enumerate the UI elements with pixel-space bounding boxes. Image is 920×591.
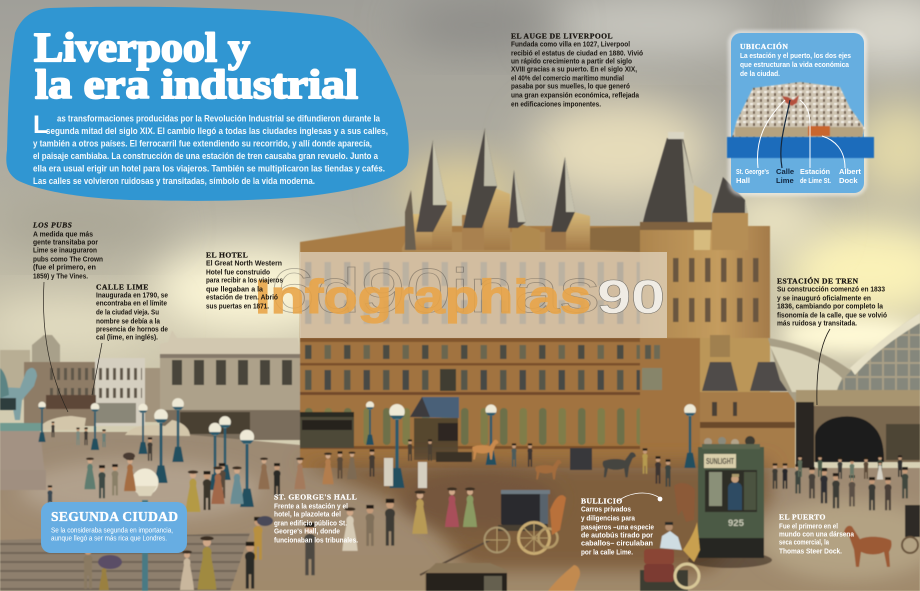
map: labels: Lime [776, 176, 794, 185]
text block: El auge de Liverpool: recibió el estatus de ciudad en 1880. Vivió [511, 48, 643, 58]
hotel: turrets and spires [404, 128, 640, 252]
text block: Bullicio: BULLICIO [581, 496, 623, 506]
tram: 925 [728, 518, 745, 529]
text block: Estación de tren: ESTACIÓN DE TREN [777, 276, 859, 286]
background tram and carriages [300, 412, 636, 488]
tram [674, 436, 772, 568]
text block: Calle Lime: cal (lime, en inglés). [96, 332, 158, 342]
text block: St. George's Hall: gran edificio público St. [274, 518, 347, 528]
text block: Estación de tren: más ruidosa y transitada. [777, 318, 857, 328]
text block: Calle Lime: CALLE LIME [96, 282, 149, 292]
text block: El puerto: Fue el primero en el [779, 522, 838, 530]
intro text: L [33, 111, 48, 139]
text block: Los pubs: Lime se inauguraron [33, 246, 97, 254]
station roof [768, 313, 920, 470]
text block: Bullicio: Carros privados [581, 504, 631, 514]
far-left buildings [0, 335, 163, 426]
tram: SUNLIGHT [706, 457, 734, 466]
cart with barrels [640, 522, 700, 591]
foreground carriage and horses [425, 505, 920, 591]
text block: Los pubs [32, 220, 103, 280]
text block: Calle Lime: Inaugurada en 1790, se [96, 290, 168, 300]
panel: Ubicación locator map: de la ciudad. [740, 69, 780, 78]
text block: El hotel [206, 250, 283, 310]
text block: Calle Lime: presencia de hornos de [96, 324, 168, 334]
text block: Estación de tren [777, 276, 887, 328]
illustration: Lime Street scene [0, 128, 920, 591]
map: leaders [757, 100, 845, 168]
panel: Ubicación locator map: La estación y el puerto, los dos ejes [740, 51, 851, 60]
foreground lamp [132, 468, 158, 591]
text block: El hotel: para recibir a los viajeros [206, 276, 283, 284]
intro text: Las calles se volvieron ruidosas y transitadas, símbolo de la vida moderna. [33, 176, 315, 186]
title [34, 24, 358, 107]
panel: Ubicación locator map [727, 30, 874, 196]
panel: Segunda ciudad: Se la consideraba segunda en importancia, [51, 526, 173, 534]
text block: Los pubs: A medida que más [33, 230, 93, 238]
text block: El puerto: EL PUERTO [779, 512, 826, 522]
text block: El hotel: estación de tren. Abrió [206, 292, 278, 302]
text block: St. George's Hall: funcionaban los tribunales. [274, 536, 358, 544]
text block: El puerto: seca comercial, la [779, 538, 830, 546]
text block: Los pubs: 1859) y The Vines. [33, 272, 88, 280]
panel: Ubicación locator map: que estructuran la vida económica [740, 60, 850, 69]
text block: El puerto: mundo con una dársena [779, 530, 855, 538]
text block: El auge de Liverpool: una gran expansión económica, reflejada [511, 90, 640, 100]
map: city block [732, 82, 865, 138]
text block: Los pubs: (fue el primero, en [33, 262, 96, 272]
text block: El hotel: sus puertas en 1871. [206, 302, 269, 310]
stone lions [38, 416, 190, 436]
text block: Los pubs: gente transitaba por [33, 238, 98, 246]
text block: El hotel: EL HOTEL [206, 250, 248, 260]
text block: El puerto: Thomas Steer Dock. [779, 546, 842, 556]
text block: Los pubs: LOS PUBS [32, 220, 72, 230]
text block: Bullicio: pasajeros –una especie [581, 522, 654, 532]
panel: Segunda ciudad: aunque llegó a ser más rica que Londres. [51, 534, 167, 542]
text block: Estación de tren: y se inauguró oficialmente en [777, 294, 871, 302]
text block: Calle Lime: nombre se debía a la [96, 316, 161, 326]
watermark: 90 [597, 270, 665, 323]
crowd [48, 422, 908, 590]
text block: St. George's Hall: George's Hall, donde [274, 526, 340, 536]
text block: Bullicio: por la calle Lime. [581, 548, 633, 556]
text block: El auge de Liverpool: XVIII gracias a su puerto. En el siglo XIX, [511, 64, 637, 74]
leader: Estación de tren [817, 329, 830, 405]
map: labels: Albert [839, 167, 861, 176]
map: sea [727, 137, 874, 158]
hotel: clock tower and roofs [640, 132, 795, 470]
text block: El auge de Liverpool [511, 32, 643, 108]
map: labels: Calle [776, 167, 794, 176]
text block: El auge de Liverpool: Fundada como villa en 1027, Liverpool [511, 40, 630, 48]
pale tower behind the hotel [305, 250, 345, 340]
text block: Estación de tren: 1836, cambiando por completo la [777, 302, 884, 310]
intro text: ella era usual erigir un hotel para los viajeros. También se multiplicaron las tiendas y cafés. [33, 164, 385, 174]
intro text: as transformaciones producidas por la Revolución Industrial se difundieron durante la [57, 114, 381, 124]
text block: El hotel: Hotel fue construido [206, 268, 270, 276]
title: Liverpool y [34, 24, 251, 70]
intro text [33, 111, 388, 186]
intro text: el paisaje cambiaba. La construcción de una estación de tren causaba gran revuelo. Junto a [33, 151, 379, 161]
leader: Calle Lime [92, 343, 102, 395]
map: labels: Hall [736, 176, 750, 185]
street surface [0, 432, 920, 591]
text block: Los pubs: pubs como The Crown [33, 254, 103, 264]
text block: St. George's Hall: ST. GEORGE'S HALL [274, 492, 357, 502]
watermark: Infographias [255, 270, 591, 323]
text block: Calle Lime: encontraba en el límite [96, 298, 167, 308]
text block: El auge de Liverpool: en edificaciones imponentes. [511, 100, 601, 108]
panel: Segunda ciudad [41, 502, 187, 553]
carriage [484, 490, 566, 554]
text block: Calle Lime: de la ciudad vieja. Su [96, 308, 159, 316]
panel: Segunda ciudad: SEGUNDA CIUDAD [51, 509, 178, 524]
map: labels: Dock [839, 176, 858, 185]
street lamps [38, 398, 696, 507]
text block: St. George's Hall: Frente a la estación y el [274, 502, 348, 510]
text block: Bullicio: de autobús tirado por [581, 530, 653, 540]
text block: El puerto [779, 512, 855, 556]
watermark [255, 252, 667, 338]
text block: St. George's Hall [274, 492, 358, 544]
panel: title and intro [6, 7, 409, 201]
map: labels [736, 167, 861, 185]
intro text: y también a otros países. El ferrocarril fue extendiendo su recorrido, y allí donde aparecía, [33, 138, 372, 148]
text block: Bullicio: y diligencias para [581, 514, 636, 522]
text block: El auge de Liverpool: el 40% del comercio marítimo mundial [511, 74, 624, 82]
leader: Los pubs [43, 282, 68, 412]
watermark: 6d90inas [270, 257, 600, 326]
text block: Estación de tren: fisonomía de la calle, que se volvió [777, 310, 887, 320]
text block: St. George's Hall: hotel, la plazoleta del [274, 510, 341, 518]
text block: El hotel: El Great North Western [206, 258, 282, 268]
leader: Bullicio [618, 493, 662, 501]
intro text: segunda mitad del siglo XIX. El cambio llegó a todas las ciudades inglesas y a sus calles, [46, 126, 388, 136]
text block: Bullicio [581, 496, 654, 556]
hotel: main wing [300, 226, 665, 470]
classical building [160, 330, 300, 440]
hotel entrance canopy [410, 397, 459, 460]
text block: El auge de Liverpool: EL AUGE DE LIVERPOOL [511, 32, 613, 40]
text block: El hotel: que llegaban a la [206, 284, 264, 294]
statue on plinth [0, 368, 46, 490]
text block: Calle Lime [96, 282, 168, 342]
map: labels: Estación [800, 167, 830, 176]
text block: Estación de tren: Su construcción comenzó en 1833 [777, 284, 885, 294]
text block: El auge de Liverpool: pasaba por sus muelles, lo que generó [511, 82, 630, 90]
text block: El auge de Liverpool: un rápido crecimiento a partir del siglo [511, 56, 632, 66]
title: la era industrial [35, 61, 358, 107]
map: labels: de Lime St. [800, 176, 831, 185]
map: labels: St. George's [736, 167, 769, 176]
panel: Ubicación locator map: UBICACIÓN [740, 41, 788, 51]
text block: Bullicio: caballos– circulaban [581, 538, 653, 548]
